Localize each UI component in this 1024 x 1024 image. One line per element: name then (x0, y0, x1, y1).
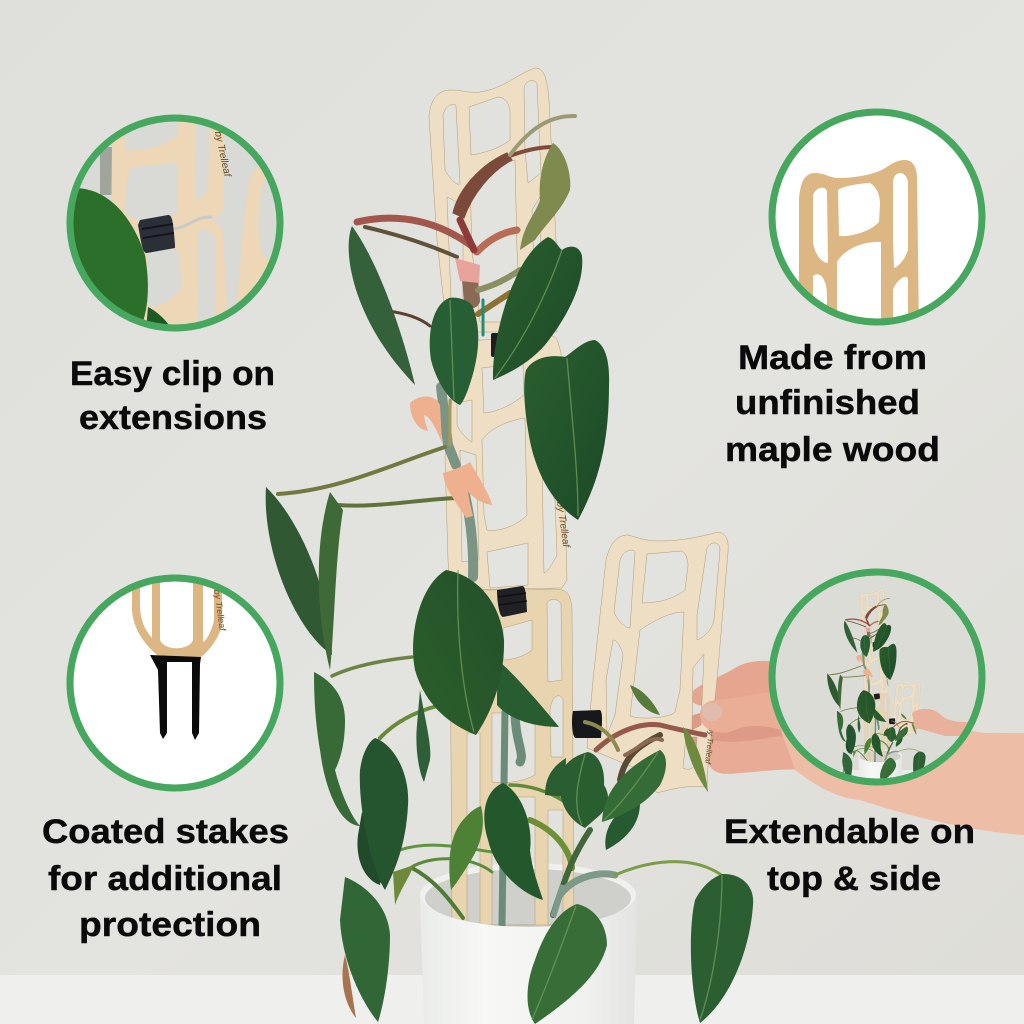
trellis: middle section (445, 335, 567, 590)
black connector clip upper (491, 333, 500, 357)
ring (772, 572, 982, 782)
large leaf upper right (493, 237, 582, 380)
caption: made from unfinished maple wood: maple wood (725, 431, 940, 469)
caption: easy clip on extensions: Easy clip on (70, 355, 275, 393)
leaf right cluster left (560, 752, 608, 828)
leaf hanging right (691, 874, 753, 1023)
caption: coated stakes: protection (79, 906, 261, 944)
miniature table (837, 770, 913, 777)
engraved maker mark: by Trelleaf (554, 501, 571, 549)
index finger (690, 661, 790, 706)
metal stake strip (100, 147, 112, 195)
caption: coated stakes: Coated stakes (42, 813, 289, 851)
miniature plant (827, 589, 926, 782)
big centre leaf (413, 570, 504, 735)
leaf lower left dark (357, 812, 381, 885)
caption: extendable on top and side: Extendable on (724, 813, 975, 851)
caption: easy clip on extensions (70, 355, 275, 437)
pink leaf tip (343, 955, 356, 1018)
pot front (420, 895, 637, 1024)
engraved text: by Trelleaf (212, 589, 228, 633)
engraved text: by Trelleaf (212, 130, 233, 179)
thin leaf on side trellis (683, 727, 708, 792)
middle finger (687, 712, 790, 755)
leaf over pot (528, 904, 607, 1024)
thumb in front of trellis (700, 692, 795, 735)
leaf top centre (430, 298, 478, 405)
black connector clip side (572, 710, 602, 738)
gap line between sections (173, 217, 212, 229)
inset circle: extendable on top and side (770, 572, 985, 790)
leaf lower left (360, 738, 408, 890)
leaf right cluster right (602, 750, 666, 822)
thumbnail (702, 703, 722, 721)
ring (772, 112, 982, 322)
trellis: main top section (429, 68, 557, 332)
small leaf behind (545, 758, 566, 797)
leaf bottom left (340, 877, 390, 1022)
ring (70, 578, 280, 788)
leaf lower far left (314, 672, 360, 826)
leaf far left (266, 487, 332, 655)
clip (138, 215, 175, 253)
leaf veins (450, 250, 722, 1020)
narrow leaf upper left (349, 226, 415, 385)
small narrow leaf centre (416, 690, 430, 782)
stems (278, 116, 720, 925)
light green leaf (449, 806, 483, 890)
small leaf (146, 307, 168, 324)
inset circle: unfinished maple wood (772, 112, 982, 330)
caption: extendable on top and side (724, 813, 975, 898)
clip ridges (142, 224, 174, 238)
lower fingers (708, 735, 805, 774)
engraved mark on side trellis: by Trelleaf (703, 727, 716, 765)
fingers and arm behind side trellis (687, 661, 1024, 835)
black connector clip middle (497, 586, 527, 617)
leaf under centre right (497, 662, 559, 727)
wood trellis bottom (132, 582, 222, 657)
wood trellis close-up (110, 112, 227, 330)
caption: extendable on top and side: top & side (767, 860, 941, 898)
ring (70, 118, 280, 328)
leaf close-up (74, 188, 148, 320)
leaf centre lower (484, 783, 543, 900)
miniature hand and arm (912, 708, 968, 736)
caption: made from unfinished maple wood: unfinished (735, 384, 920, 422)
stems over pot rim (553, 885, 563, 917)
caption: easy clip on extensions: extensions (79, 399, 267, 437)
inset circle: coated stakes (70, 575, 280, 788)
inset circle: clip on extensions (60, 112, 290, 330)
maple trellis (799, 160, 919, 330)
white table surface (0, 975, 1024, 1024)
small olive leaf at top (520, 143, 570, 250)
pink new leaves (410, 396, 492, 518)
olive leaflet (393, 865, 414, 905)
small leaf on side trellis (630, 685, 660, 715)
trellis: bottom section (450, 589, 574, 925)
pink sheath on stem (455, 258, 480, 283)
trellis: side extension (587, 532, 728, 793)
caption: made from unfinished maple wood: Made from (738, 339, 927, 377)
pot interior (420, 863, 636, 927)
plant with trellis and pot (266, 68, 753, 1024)
leaf right cluster lower (605, 803, 640, 850)
black coated stakes (150, 655, 201, 740)
caption: coated stakes (42, 813, 289, 944)
wood right piece (237, 166, 270, 303)
caption: made from unfinished maple wood (725, 339, 940, 469)
caption: coated stakes: for additional (48, 860, 282, 898)
narrow leaf left (319, 492, 343, 670)
leaf heart shaped right (524, 340, 609, 520)
arm (770, 700, 1024, 835)
